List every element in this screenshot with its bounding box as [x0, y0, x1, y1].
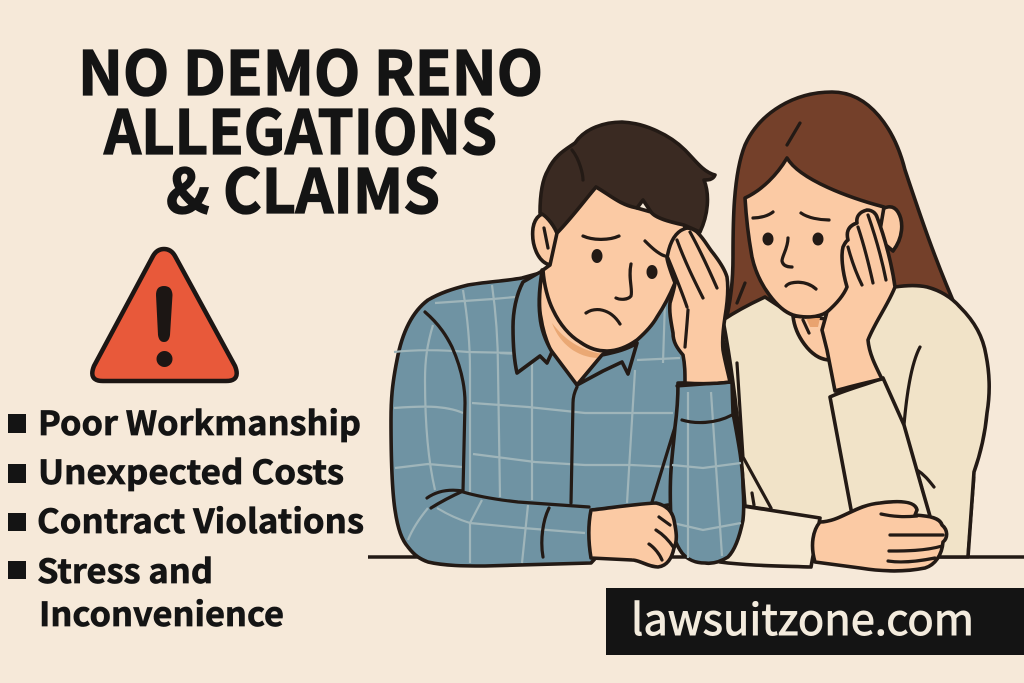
bullet: stress and inconvenience: Stress and: [37, 545, 213, 593]
man neck: [539, 270, 620, 385]
woman hand on cheek: [822, 210, 895, 391]
man plaid pattern: [394, 285, 680, 563]
man hair: [540, 122, 715, 233]
man cuff top: [677, 382, 732, 386]
woman sweater folds: [737, 347, 974, 555]
title: ALLEGATIONS: [103, 83, 497, 172]
icon: warning triangle: [92, 249, 237, 381]
illustration: woman: [720, 92, 989, 571]
man shirt lines: [425, 312, 589, 557]
woman hair strand: [787, 123, 800, 145]
man face details: [583, 236, 665, 324]
woman hair: [725, 92, 958, 340]
man shirt: [391, 273, 742, 566]
woman hand on table: [813, 502, 947, 571]
woman sweater: [723, 286, 989, 557]
man forearm sleeve: [652, 382, 744, 563]
woman neck: [793, 316, 840, 360]
man collar: [513, 271, 637, 385]
bullet: unexpected costs: Unexpected Costs: [38, 446, 344, 494]
table line: [368, 555, 1024, 559]
title: & CLAIMS: [166, 142, 440, 231]
illustration: man: [391, 122, 744, 567]
title: [78, 24, 543, 231]
bullet: contract violations: Contract Violations: [37, 495, 364, 543]
man face: [543, 187, 690, 351]
woman forearm cuff: [720, 506, 820, 567]
man hand on table: [589, 503, 676, 567]
man ear: [533, 214, 558, 265]
title: NO DEMO RENO: [78, 24, 543, 113]
bullet: stress and inconvenience: Inconvenience: [39, 588, 284, 636]
man neck shadow: [552, 323, 602, 358]
website banner: lawsuitzone.com: [631, 586, 974, 648]
woman arm sleeve: [830, 378, 934, 530]
woman face details: [753, 212, 829, 289]
bullet: poor workmanship: Poor Workmanship: [38, 397, 361, 445]
woman ear: [879, 207, 902, 251]
man hand on head: [667, 228, 730, 384]
woman face: [745, 158, 884, 317]
man hair strand: [572, 150, 583, 180]
bullet list: [8, 397, 364, 636]
bullet: stress and inconvenience: [8, 545, 284, 636]
